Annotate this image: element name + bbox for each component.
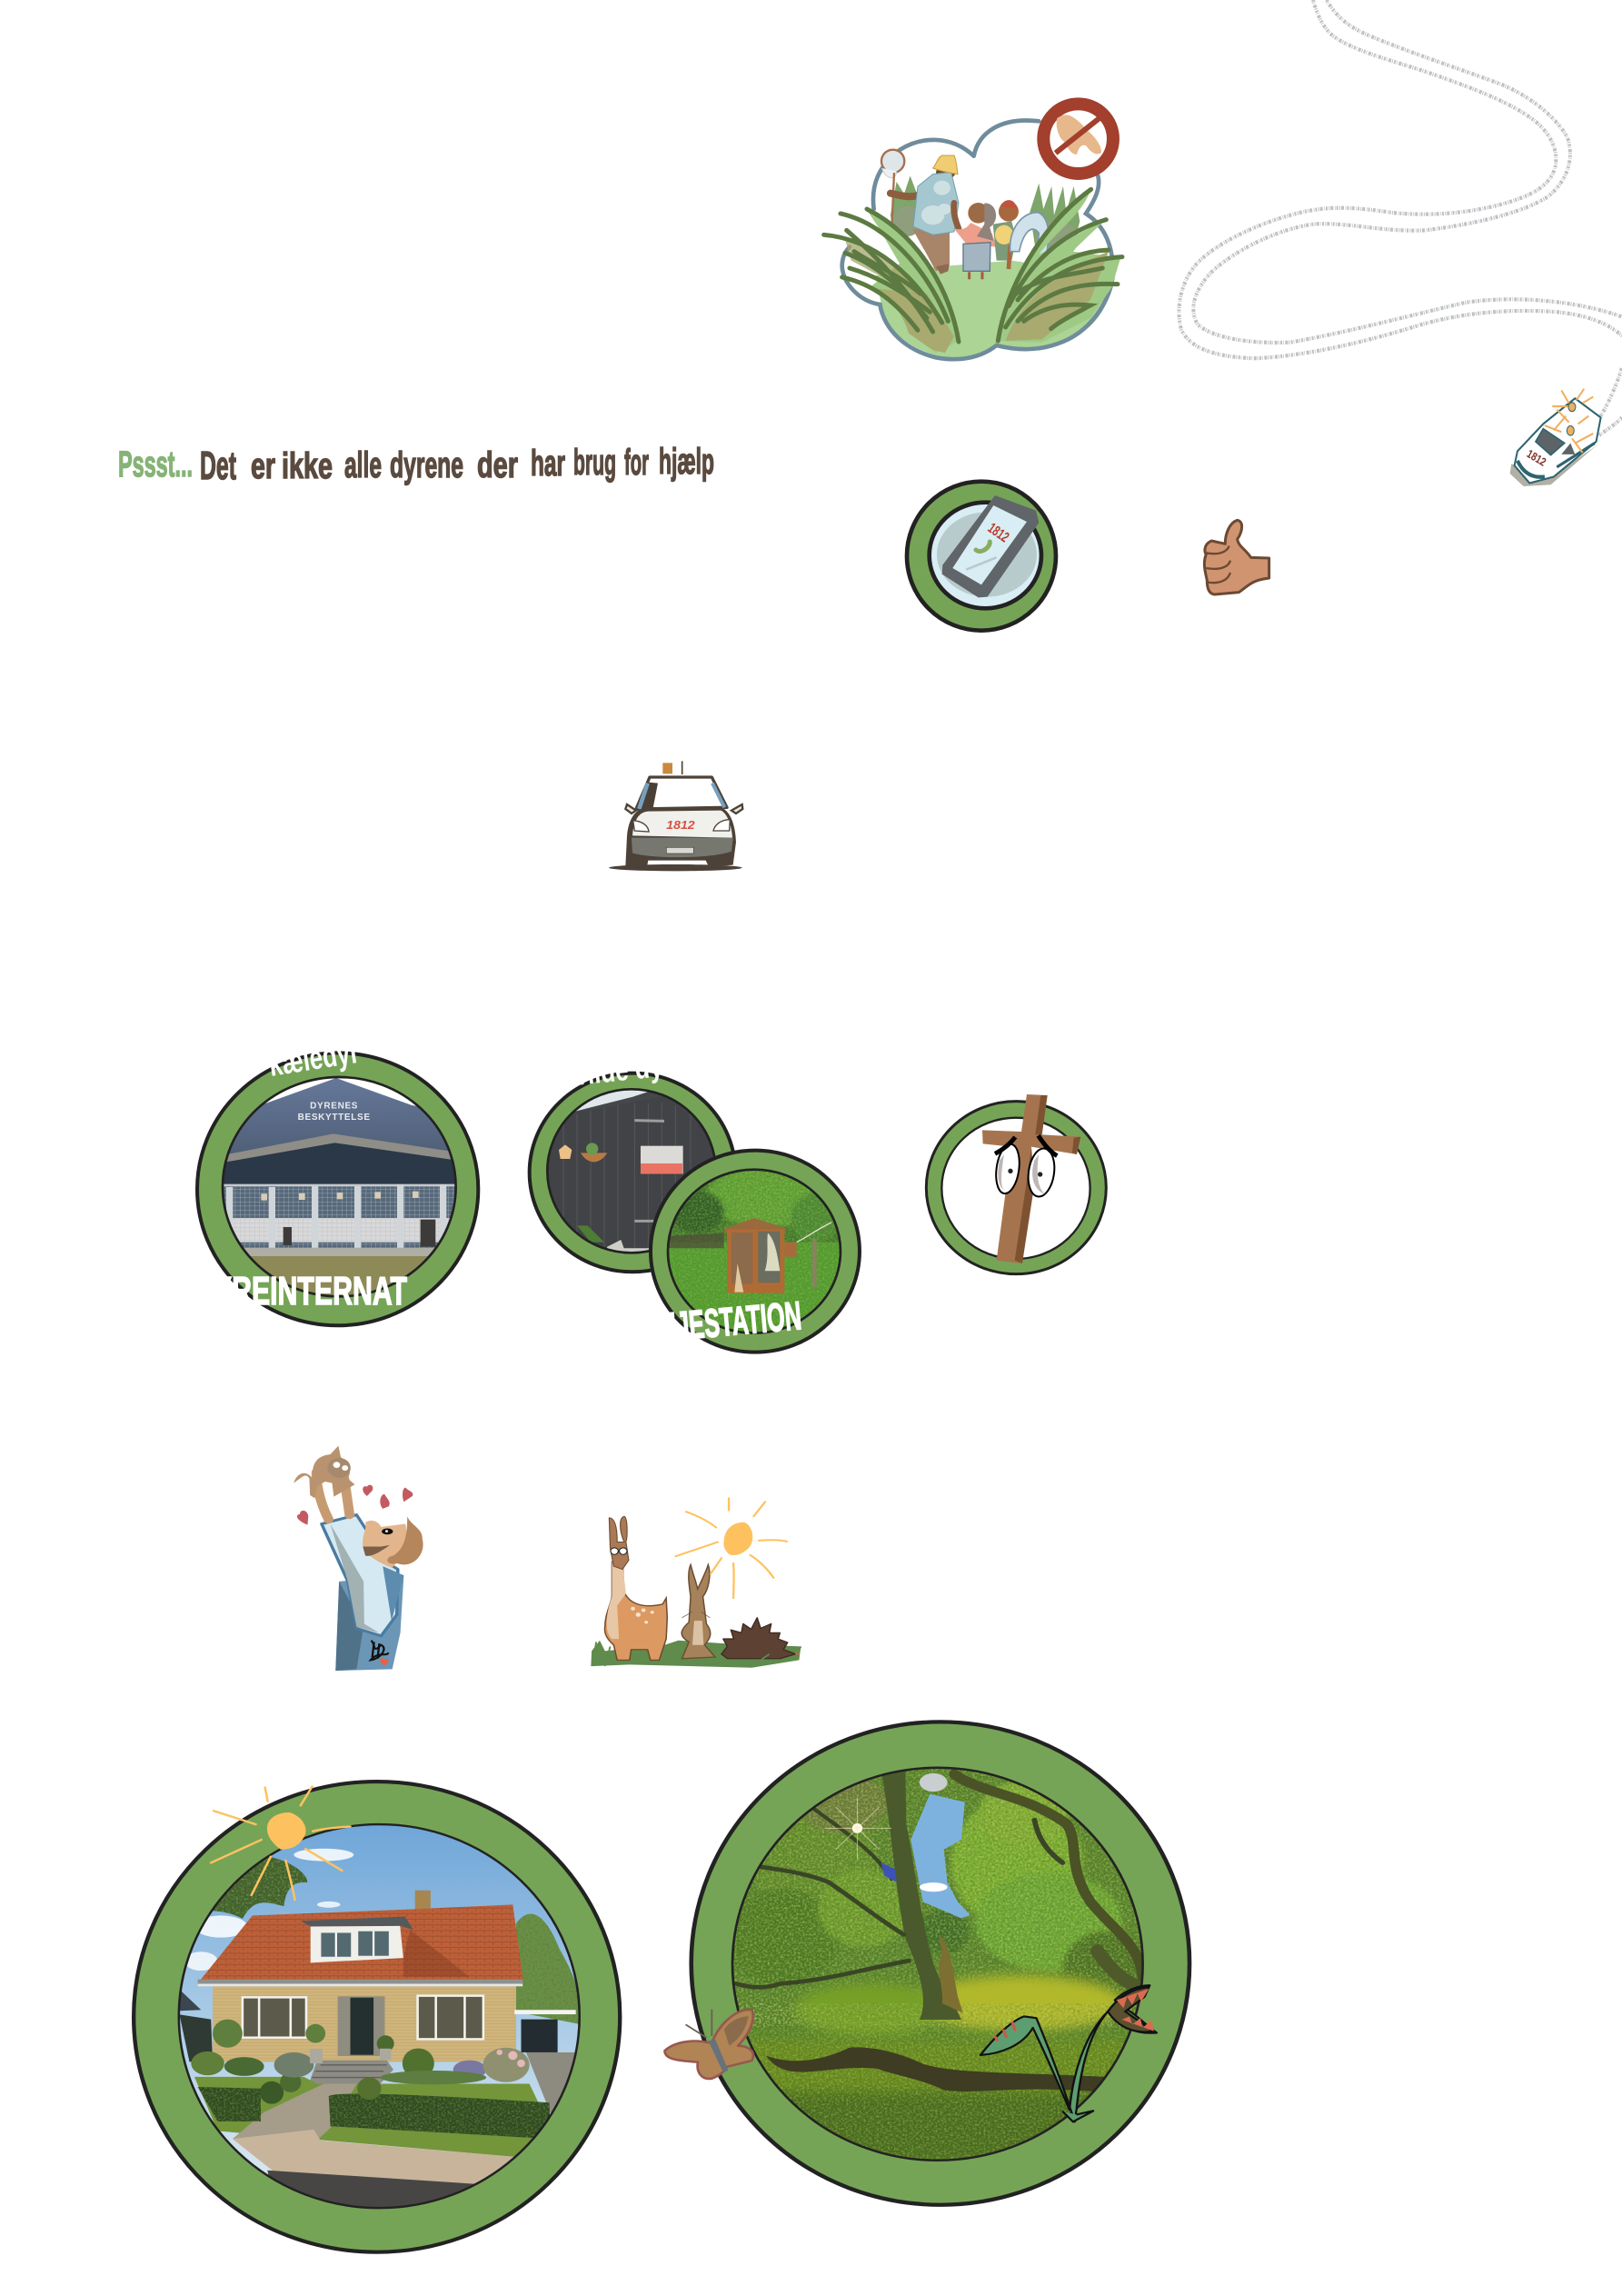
boy — [993, 200, 1019, 269]
icon: cross with eyes in circle — [926, 1094, 1106, 1274]
icon: phone circle — [907, 482, 1056, 631]
text: Pssst intro line: Det — [200, 444, 236, 488]
trees — [891, 175, 1080, 252]
man with butterfly net — [881, 150, 959, 275]
icon: rescue car front — [609, 761, 742, 871]
text: Pssst intro line: der — [477, 445, 518, 485]
tyre tracks — [1179, 0, 1622, 435]
photo: shelter building — [224, 1078, 454, 1295]
icon: venus flytrap — [980, 1985, 1157, 2121]
icon: rescue car front: 1812 — [666, 819, 695, 832]
panel: house circle — [134, 1782, 620, 2252]
text: kæledyr label: kæledyr — [266, 1033, 362, 1083]
panel: forest circle — [665, 1722, 1189, 2205]
text: Pssst intro line: dyrene — [390, 445, 463, 485]
icon: rescue car from above: 1812 — [1525, 447, 1548, 469]
photo: aviary in garden — [669, 1171, 840, 1333]
text: Pssst intro line: hjælp — [659, 442, 714, 482]
girl — [954, 203, 997, 279]
text: Pssst intro line: ikke — [282, 446, 333, 486]
text: Pssst intro line: brug — [573, 443, 616, 483]
icon: no-touch badge — [1043, 104, 1113, 174]
text: Pssst intro line: Pssst... — [118, 444, 193, 484]
grass right — [998, 189, 1120, 343]
cloud outline — [842, 121, 1113, 359]
panel: pet shelter circle — [197, 1053, 478, 1325]
text: DYREINTERNAT label: DYREINTERNAT — [194, 1269, 407, 1313]
text: Pssst intro line: for — [624, 443, 649, 483]
text: VILDTPLEJESTATION label: VILDTPLEJESTATION — [564, 1293, 803, 1359]
text: Pssst intro line: alle — [344, 445, 382, 485]
icon: sun — [211, 1787, 351, 1900]
illustration: family in tall grass with no-touch badge — [824, 104, 1122, 360]
text: Pssst intro line: er — [251, 446, 275, 486]
panel: wildlife station circles — [530, 1073, 860, 1353]
icon: thumbs up — [1204, 520, 1269, 594]
icon: phone circle: 1812 — [985, 521, 1011, 545]
illustration: deer hare hedgehog and sun — [591, 1498, 801, 1668]
photo: shelter building: BESKYTTELSE — [298, 1113, 371, 1123]
photo: brick house and garden — [174, 1820, 586, 2216]
photo: dark shed — [549, 1091, 713, 1252]
grass left — [866, 209, 959, 353]
icon: rescue car from above — [1510, 389, 1601, 486]
text: vilde dyr label: vilde dyr — [572, 1048, 673, 1093]
photo: shelter building: DYRENES — [310, 1101, 358, 1111]
ground — [875, 261, 1110, 360]
illustration: man lifting kitten with hearts — [294, 1446, 423, 1671]
text: Pssst intro line — [118, 442, 714, 488]
text: Pssst intro line: har — [531, 444, 565, 484]
icon: butterfly — [665, 2009, 753, 2079]
bending child — [1010, 213, 1049, 261]
photo: old forest with sun — [728, 1764, 1149, 2167]
